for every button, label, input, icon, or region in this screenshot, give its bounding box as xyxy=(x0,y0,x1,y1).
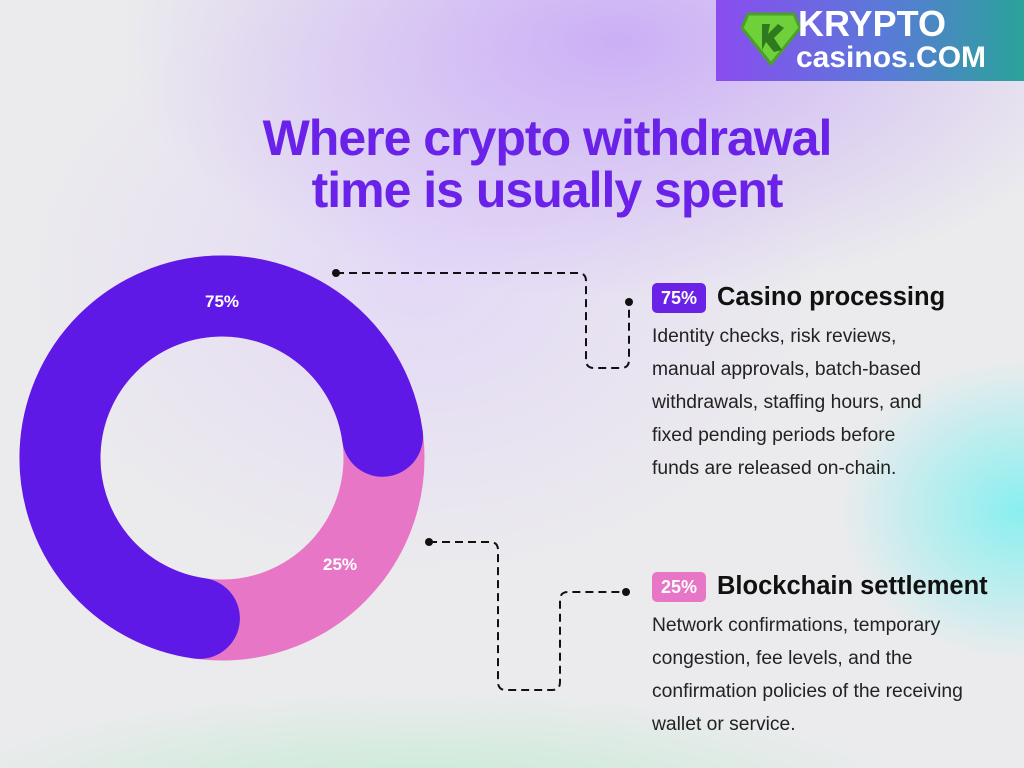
heading: Blockchain settlement xyxy=(717,572,988,600)
body: Identity checks, risk reviews, xyxy=(652,326,896,347)
panel: blockchain settlement xyxy=(652,572,988,735)
label 25%: 25% xyxy=(323,555,357,574)
title: Where crypto withdrawal xyxy=(263,110,831,166)
badge 25% xyxy=(652,572,706,602)
body: fixed pending periods before xyxy=(652,425,895,446)
title: time is usually spent xyxy=(312,162,782,218)
body: wallet or service. xyxy=(652,714,796,735)
badge 75% xyxy=(652,283,706,313)
body: manual approvals, batch-based xyxy=(652,359,921,380)
body xyxy=(652,326,922,479)
logo xyxy=(716,0,1024,81)
panel: casino processing xyxy=(652,283,945,479)
body: funds are released on-chain. xyxy=(652,458,896,479)
heading: Casino processing xyxy=(717,283,945,311)
icon: diamond K xyxy=(740,12,800,66)
title xyxy=(262,110,831,218)
label 75%: 75% xyxy=(205,292,239,311)
body: withdrawals, staffing hours, and xyxy=(652,392,922,413)
badge 75%: 75% xyxy=(661,288,697,308)
body: confirmation policies of the receiving xyxy=(652,681,963,702)
badge 25%: 25% xyxy=(661,577,697,597)
body: congestion, fee levels, and the xyxy=(652,648,912,669)
donut chart xyxy=(19,256,424,660)
connector bottom xyxy=(429,542,626,690)
logo text: KRYPTO xyxy=(798,3,946,44)
logo: casinos.COM xyxy=(796,41,986,74)
body: Network confirmations, temporary xyxy=(652,615,940,636)
body xyxy=(652,615,963,735)
